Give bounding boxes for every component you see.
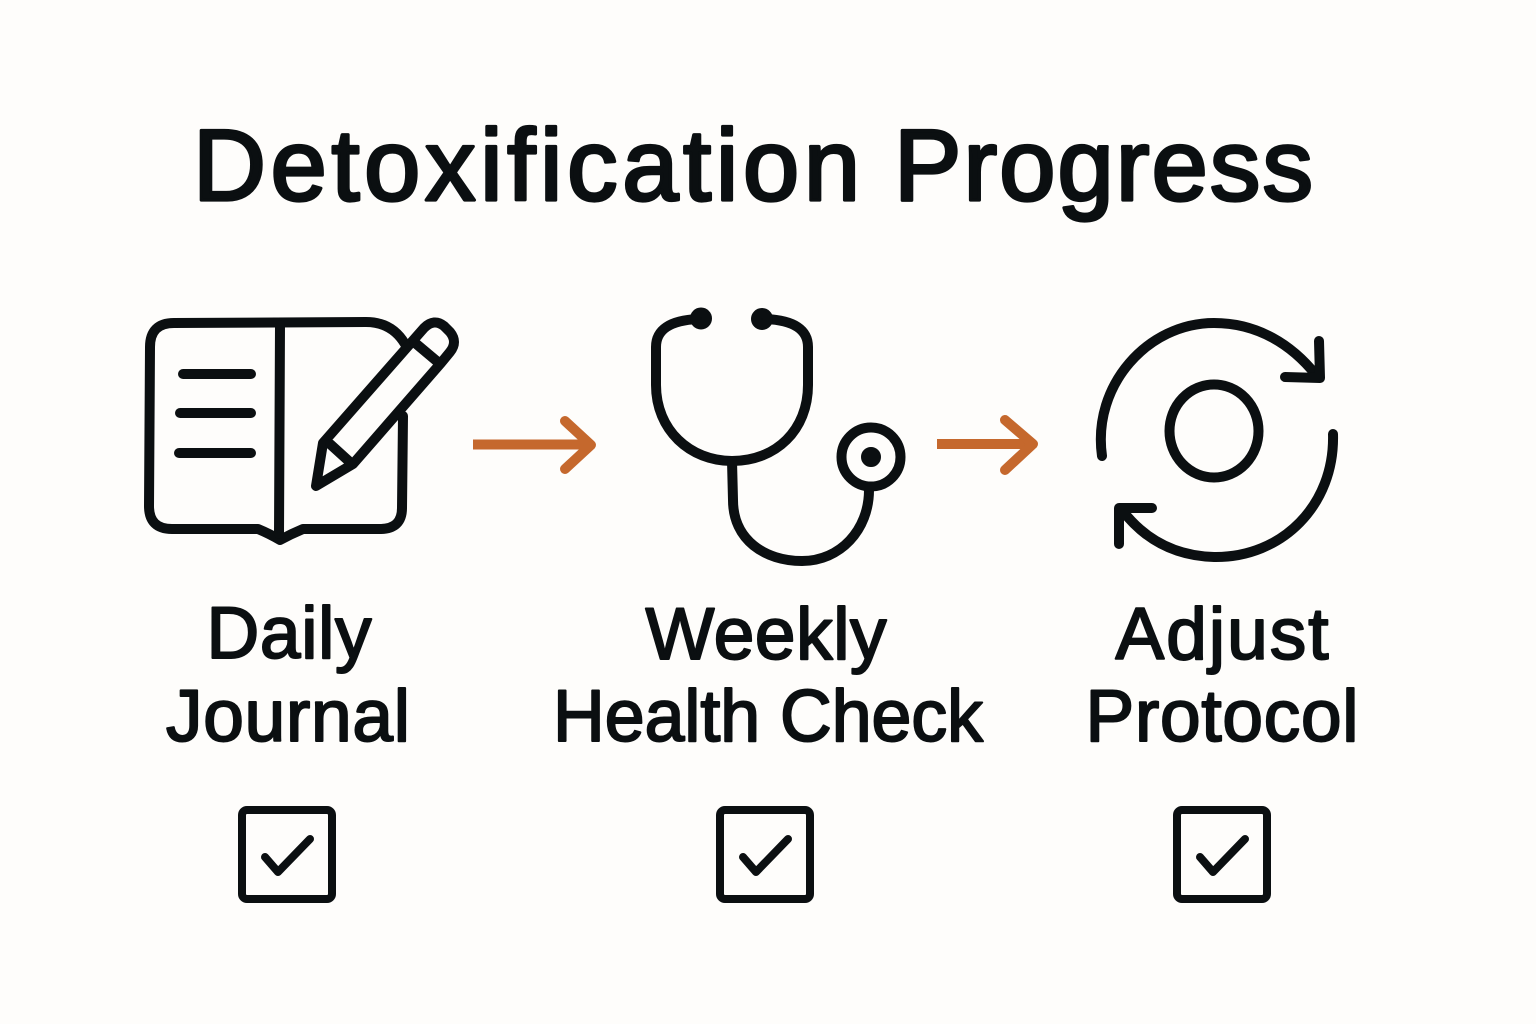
checkbox: adjust protocol xyxy=(1177,810,1267,899)
label: daily journal: Journal xyxy=(166,676,410,757)
arrow: health check to protocol xyxy=(937,420,1033,470)
label: adjust protocol xyxy=(1086,594,1358,757)
label: weekly health check: Weekly xyxy=(646,594,887,675)
title: Detoxification xyxy=(193,110,860,222)
label: adjust protocol: Adjust xyxy=(1116,594,1328,675)
label: weekly health check xyxy=(553,594,983,757)
title: Progress xyxy=(894,110,1313,222)
label: daily journal xyxy=(166,593,410,757)
title xyxy=(193,110,1313,222)
icon: stethoscope xyxy=(656,312,900,561)
icon: journal with pencil xyxy=(149,322,454,540)
checkbox: daily journal xyxy=(242,810,332,899)
arrow: journal to health check xyxy=(473,421,591,469)
icon: adjust cycle xyxy=(1101,323,1333,557)
label: adjust protocol: Protocol xyxy=(1086,676,1358,757)
label: weekly health check: Health Check xyxy=(553,676,983,757)
checkbox: weekly health check xyxy=(720,810,810,899)
label: daily journal: Daily xyxy=(206,593,372,674)
